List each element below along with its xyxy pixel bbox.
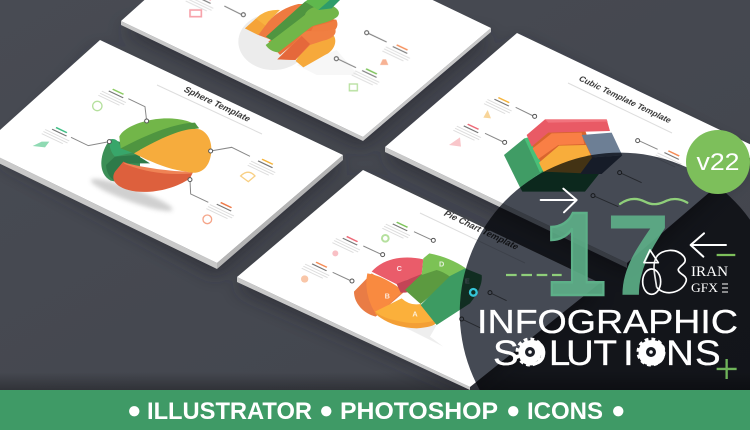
- panel: cubic slide: [385, 33, 750, 268]
- icons on sphere slide: [93, 101, 102, 111]
- slide title: Sphere Template: [182, 85, 253, 123]
- sphere chart: [33, 86, 280, 224]
- panel: sphere slide: [0, 40, 343, 269]
- gear O 2: [638, 340, 664, 364]
- footer band: ●: [127, 397, 142, 424]
- footer band: ●: [319, 397, 334, 424]
- footer band: ILLUSTRATOR: [147, 398, 312, 425]
- top slide chart: [238, 0, 358, 75]
- logo: Iran GFX: [643, 250, 728, 295]
- plus: [717, 359, 737, 379]
- title: Infographic: INFOGRAPHIC: [477, 303, 738, 340]
- slide title: Pie Chart Template: [442, 209, 521, 251]
- pie segment letters: C: [397, 264, 403, 273]
- badge: v22: [686, 130, 750, 194]
- green dash: [717, 251, 735, 258]
- footer band: ●: [611, 397, 626, 424]
- footer band: [0, 390, 750, 430]
- title: Solutions: SOLUTIONS: [493, 334, 721, 373]
- panel: top slide: [121, 0, 491, 141]
- pie segment letters: E: [465, 276, 470, 285]
- cubic chart: [449, 94, 686, 207]
- dark circle overlay: [460, 153, 750, 390]
- number 17: 7: [606, 192, 670, 320]
- footer band: ICONS: [527, 398, 603, 425]
- arrow left: [691, 233, 726, 257]
- pie segment letters: B: [385, 291, 390, 300]
- pie segment letters: D: [439, 260, 444, 269]
- decorative arrows and marks: [470, 189, 737, 379]
- badge: v22: v22: [696, 149, 740, 176]
- panel: pie chart slide: [237, 170, 600, 390]
- logo: Iran GFX: GFX: [691, 280, 719, 295]
- logo: Iran GFX: IRAN: [691, 264, 728, 280]
- pie segment letters: A: [412, 310, 418, 319]
- green dashes: [506, 271, 562, 278]
- number 17: 1: [544, 193, 608, 333]
- green wave: [620, 199, 687, 204]
- number 17: [544, 192, 670, 333]
- pie segment letters: [385, 260, 470, 319]
- gear O 1: [518, 340, 542, 364]
- cyan ring: [470, 289, 477, 296]
- footer band: ●: [506, 397, 520, 424]
- top slide callouts: [186, 0, 414, 91]
- arrow right: [541, 189, 577, 212]
- footer band: PHOTOSHOP: [340, 398, 498, 425]
- slide title: Cubic Template Template: [577, 74, 674, 125]
- pie chart: [301, 219, 507, 347]
